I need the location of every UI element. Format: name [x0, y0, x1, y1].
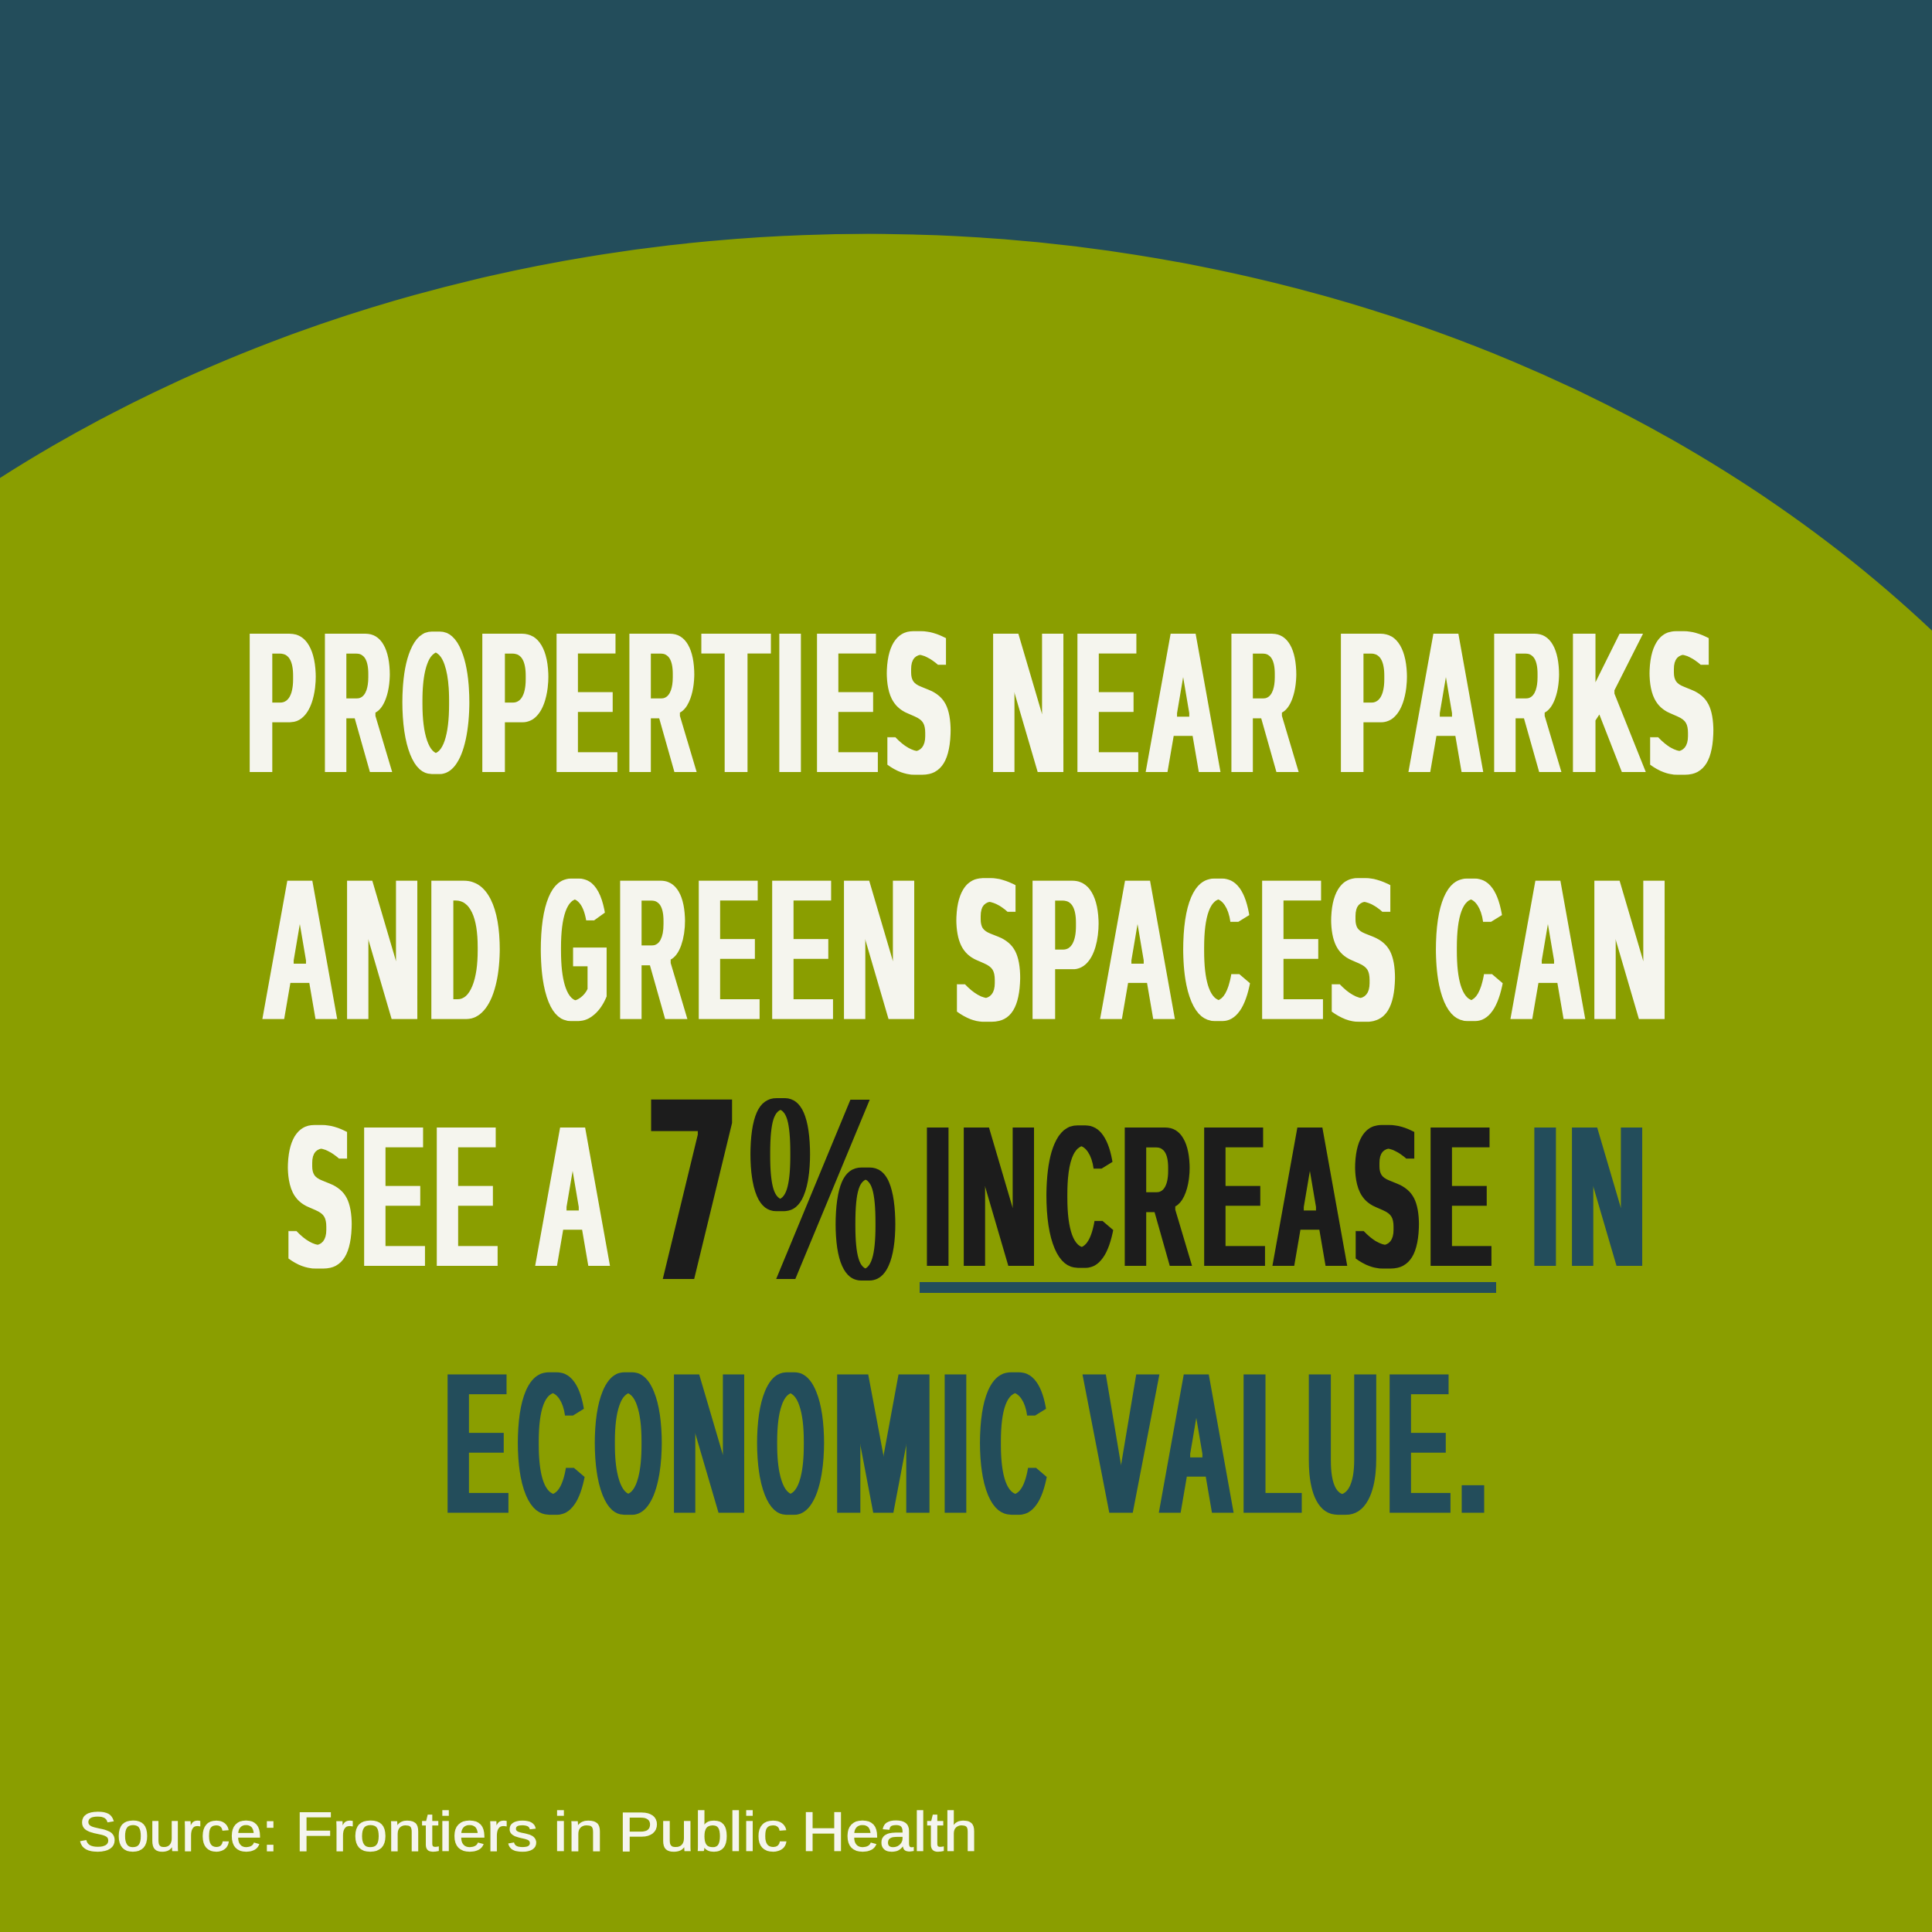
headline line 1: A [1410, 588, 1482, 818]
headline line 1: I [777, 588, 804, 818]
headline line 1: E [554, 588, 617, 818]
headline line 3: see a: S [284, 1088, 355, 1314]
headline line 2: R [617, 835, 686, 1065]
headline: A [536, 1082, 609, 1311]
headline line 1: A [1147, 588, 1219, 818]
headline line 2: A [263, 835, 337, 1065]
headline line 2: E [770, 835, 833, 1065]
headline line 4: I [942, 1329, 969, 1558]
headline line 1: R [1492, 588, 1560, 818]
emphasized word: increase: A [1274, 1082, 1346, 1311]
headline line 4: O [757, 1329, 824, 1558]
source line: Health [801, 1802, 978, 1863]
headline line 2: A [1512, 835, 1584, 1065]
headline line 2: N [1591, 835, 1668, 1065]
word: in: N [1569, 1082, 1645, 1311]
headline line 2: A [1100, 835, 1175, 1065]
headline line 4: C [980, 1329, 1046, 1558]
headline: E [1428, 1082, 1492, 1311]
headline line 4: U [1307, 1329, 1379, 1558]
source line: Public [618, 1802, 787, 1863]
emphasized word: increase: C [1046, 1082, 1112, 1311]
headline line 1: R [627, 588, 696, 818]
emphasized word: increase: E [1202, 1082, 1265, 1311]
headline line 3: see a: E [362, 1082, 425, 1311]
headline line 4: E [445, 1329, 509, 1558]
headline line 1: R [322, 588, 391, 818]
headline line 4: E [1387, 1329, 1451, 1558]
headline line 1: S [883, 594, 954, 820]
headline line 1: E [1075, 588, 1138, 818]
headline line 2: G [541, 835, 608, 1065]
headline line 1: S [1646, 594, 1716, 820]
headline line 2: C [1183, 835, 1249, 1065]
headline line 2: N [841, 835, 917, 1065]
headline line 2: S [1328, 842, 1398, 1067]
headline line 4: V [1085, 1329, 1158, 1558]
source line: Source: [78, 1802, 278, 1863]
headline line 4: N [671, 1329, 747, 1558]
headline line 4: . [1458, 1329, 1488, 1558]
headline line 1: P [479, 588, 548, 818]
headline line 4: L [1241, 1329, 1301, 1558]
headline line 1 [247, 588, 1716, 820]
headline line 2: D [429, 835, 500, 1065]
headline line 1: O [403, 588, 469, 818]
emphasized word: increase: S [1352, 1088, 1422, 1314]
headline line 2: N [344, 835, 420, 1065]
headline line 4 [445, 1329, 1488, 1558]
headline line 1: P [247, 588, 315, 818]
headline line 3: see a: E [434, 1082, 498, 1311]
headline line 2: E [696, 835, 760, 1065]
big statistic: 7% [646, 1040, 897, 1340]
headline line 1: R [1229, 588, 1298, 818]
headline line 1: N [990, 588, 1066, 818]
source line: in [553, 1802, 604, 1863]
emphasized word: increase [924, 1082, 1492, 1314]
word: in: I [1532, 1082, 1559, 1311]
headline [247, 588, 1716, 1558]
headline line 1: T [704, 588, 768, 818]
emphasized word: increase: N [961, 1082, 1037, 1311]
underline below increase [920, 1282, 1496, 1293]
headline line 4: M [833, 1329, 934, 1558]
headline line 4: C [518, 1329, 583, 1558]
emphasized word: increase: R [1122, 1082, 1191, 1311]
headline line 2: S [953, 842, 1023, 1067]
big statistic: 7%: % [748, 1040, 897, 1337]
source line: Frontiers [295, 1802, 538, 1863]
headline line 2: P [1029, 835, 1098, 1065]
headline line 3: see a [284, 1082, 609, 1314]
headline line 1: K [1570, 588, 1645, 818]
emphasized word: increase: I [924, 1082, 951, 1311]
word: in [1532, 1082, 1645, 1311]
headline line 1: E [815, 588, 878, 818]
headline line 1: P [1338, 588, 1406, 818]
headline line 2: C [1436, 835, 1502, 1065]
big statistic: 7%: 7 [646, 1049, 739, 1340]
headline line 4: O [595, 1329, 662, 1558]
headline line 2: E [1260, 835, 1323, 1065]
headline line 4: A [1159, 1329, 1233, 1558]
headline line 2 [263, 835, 1668, 1067]
